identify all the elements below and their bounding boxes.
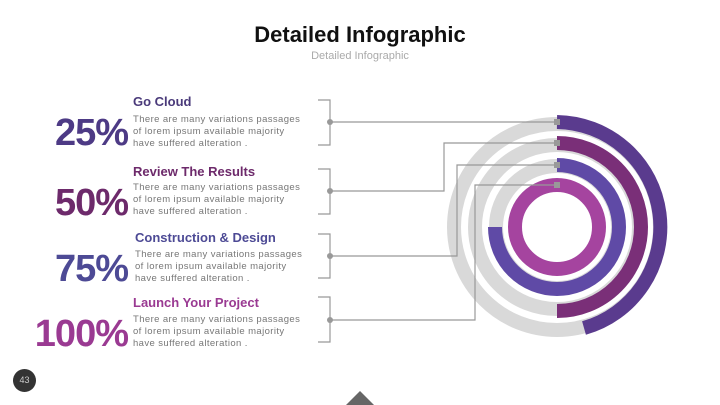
text: have suffered alteration .	[133, 338, 248, 349]
text: There are many variations passages	[135, 249, 302, 260]
text	[133, 114, 300, 149]
item: Launch	[35, 295, 300, 355]
percent 25: 25%	[55, 112, 128, 154]
item: Go Cloud	[55, 94, 300, 154]
item: Construction	[55, 230, 302, 290]
subtitle: Detailed Infographic	[311, 50, 409, 62]
heading: Go Cloud	[133, 94, 192, 109]
ring 75%	[495, 165, 619, 289]
connectors	[318, 100, 557, 342]
percent 50: 50%	[55, 182, 128, 224]
heading: Launch Your Project	[133, 295, 259, 310]
percent 75: 75%	[55, 248, 128, 290]
page number	[13, 369, 36, 392]
text: of lorem ipsum available majority	[133, 194, 285, 205]
heading: Review The Results	[133, 164, 255, 179]
bottom triangle	[346, 391, 374, 405]
ring 25%	[557, 122, 660, 328]
percent 100: 100%	[35, 313, 128, 355]
text: There are many variations passages	[133, 314, 300, 325]
text	[133, 182, 300, 217]
title: Detailed Infographic	[254, 22, 466, 47]
text: of lorem ipsum available majority	[135, 261, 287, 272]
text	[133, 314, 300, 349]
ring 50%	[557, 143, 641, 311]
text: of lorem ipsum available majority	[133, 326, 285, 337]
text: of lorem ipsum available majority	[133, 126, 285, 137]
text: There are many variations passages	[133, 114, 300, 125]
text	[135, 249, 302, 284]
ring 100%	[515, 185, 599, 269]
heading: Construction & Design	[135, 230, 276, 245]
gray rings	[454, 124, 660, 330]
text: have suffered alteration .	[135, 273, 250, 284]
page number: 43	[19, 375, 30, 385]
text: There are many variations passages	[133, 182, 300, 193]
item: Review	[55, 164, 300, 224]
text: have suffered alteration .	[133, 138, 248, 149]
text: have suffered alteration .	[133, 206, 248, 217]
